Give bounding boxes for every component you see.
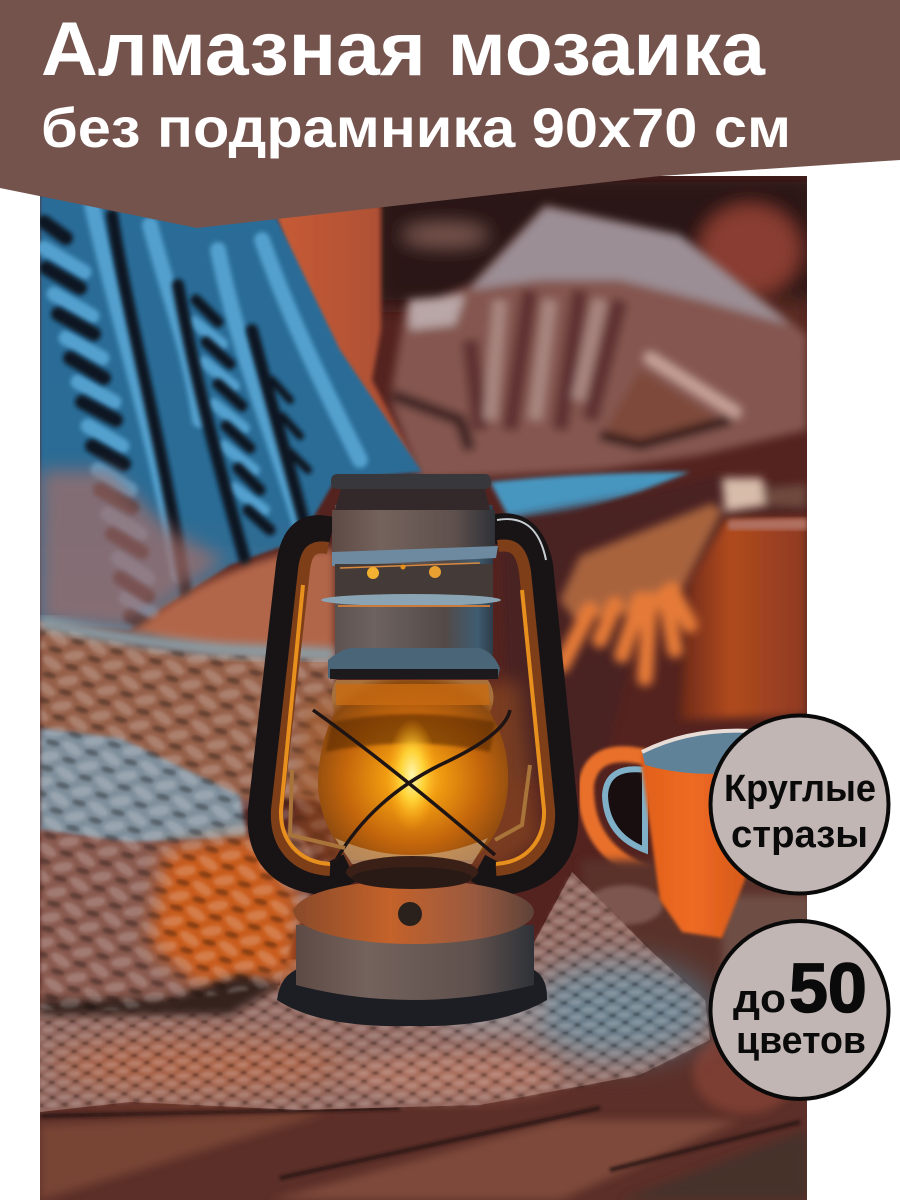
orange cushion (276, 207, 414, 460)
badge: up to 50 colors: цветов (736, 1020, 866, 1062)
badge: round rhinestones: Круглые (724, 768, 876, 810)
dark room background (40, 176, 807, 1052)
badge: round rhinestones (710, 716, 888, 894)
blurred dark upper wall (380, 176, 807, 321)
right handle (478, 519, 563, 880)
terracotta pot (680, 518, 807, 720)
left handle (263, 530, 350, 880)
badge: round rhinestones: стразы (731, 814, 868, 856)
interior warm glow (292, 680, 540, 870)
lantern (263, 474, 563, 1026)
mug handle (586, 754, 648, 874)
badge: up to 50 colors: 50 (789, 949, 867, 1027)
orange mug (640, 731, 750, 938)
pot rim (728, 518, 807, 530)
wood table (40, 1030, 807, 1200)
glass globe (318, 680, 508, 864)
blue-grey rim of upper knit (40, 622, 335, 655)
upper chimney drum (321, 474, 501, 679)
stitch texture (40, 622, 335, 1010)
pillow light strands (44, 205, 360, 614)
header banner (0, 0, 900, 228)
badge: up to 50 colors (710, 921, 888, 1099)
lower rust knit (40, 830, 320, 1010)
peach fabric behind lantern (130, 548, 335, 665)
blue-grey fabric fold (490, 472, 690, 520)
badge: up to 50 colors: до (733, 977, 786, 1021)
dark folds behind tassel (504, 479, 780, 778)
knit shadow bottom (40, 975, 280, 1015)
crossed wires (313, 710, 510, 862)
pillow dark cable channels (44, 215, 308, 628)
title: Алмазная мозаика (41, 7, 766, 92)
knitted mat (40, 872, 715, 1112)
burner wires (290, 765, 530, 848)
blurred pink blanket (390, 205, 807, 480)
upper brown knit (40, 622, 335, 800)
panel: lantern photograph (40, 176, 815, 1200)
pillow warm lower shade (40, 470, 225, 630)
wood surface behind mug (582, 852, 780, 1048)
subtitle: без подрамника 90х70 см (41, 96, 791, 159)
orange lit knit (150, 835, 298, 985)
wooden post (720, 892, 807, 966)
burner collar (346, 856, 478, 878)
chunky knit pile (40, 622, 335, 1015)
grey-blue knit band (40, 728, 248, 845)
base (277, 867, 547, 1026)
blue cable-knit pillow (40, 195, 422, 630)
saucer (587, 885, 663, 925)
orange tassel (560, 478, 807, 678)
